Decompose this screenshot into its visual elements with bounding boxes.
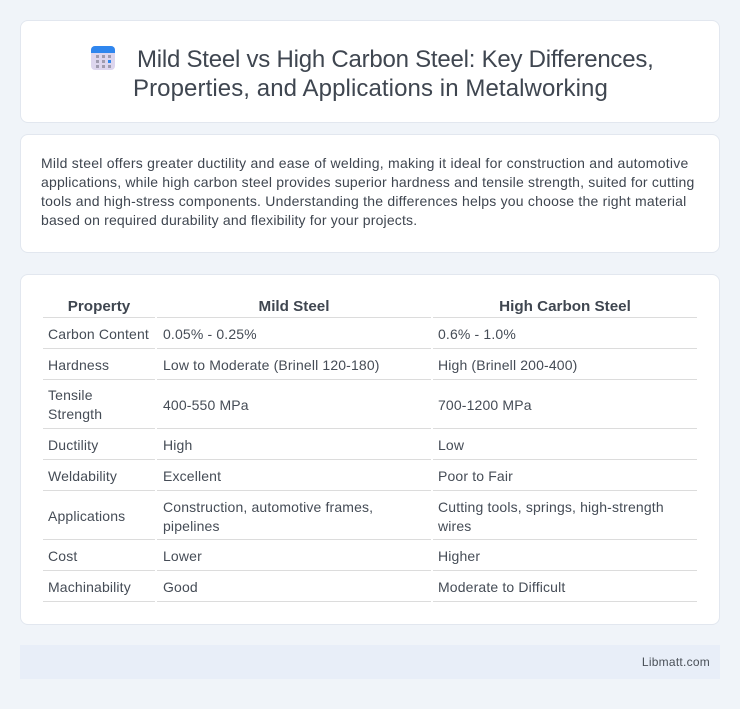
footer bar bbox=[20, 645, 720, 679]
row: hardness: Low to Moderate (Brinell 120-180) bbox=[163, 357, 380, 373]
footer bar: Libmatt.com bbox=[642, 655, 710, 669]
row: weldability: Excellent bbox=[163, 468, 221, 484]
panel: comparison table bbox=[20, 274, 720, 625]
row: tensile strength: 400-550 MPa bbox=[163, 397, 249, 413]
row: carbon content: 0.05% - 0.25% bbox=[163, 326, 257, 342]
description text: Mild steel offers greater ductility and ease of welding, making it ideal for construction and automotive bbox=[41, 155, 689, 171]
title bbox=[133, 46, 654, 102]
row: ductility: Low bbox=[438, 437, 464, 453]
row: applications: Cutting tools, springs, high-strength bbox=[438, 499, 664, 515]
description text bbox=[41, 155, 694, 228]
row: cost bbox=[48, 548, 480, 564]
panel: title card bbox=[20, 20, 720, 123]
row: hardness: High (Brinell 200-400) bbox=[438, 357, 577, 373]
row: tensile strength: 700-1200 MPa bbox=[438, 397, 532, 413]
table headers: Property bbox=[68, 298, 130, 315]
row: machinability: Machinability bbox=[48, 579, 131, 595]
row: weldability: Weldability bbox=[48, 468, 117, 484]
description text: tools and high-stress components. Understanding the differences helps you choose the right material bbox=[41, 193, 686, 209]
row: applications: pipelines bbox=[163, 518, 220, 534]
description text: applications, while high carbon steel provides superior hardness and tensile strength, suited for cutting bbox=[41, 174, 694, 190]
row: machinability: Moderate to Difficult bbox=[438, 579, 565, 595]
table headers: Mild Steel bbox=[259, 298, 329, 315]
row: applications: Applications bbox=[48, 508, 125, 524]
row: applications: Construction, automotive frames, bbox=[163, 499, 373, 515]
row: weldability: Poor to Fair bbox=[438, 468, 513, 484]
row: cost: Higher bbox=[438, 548, 480, 564]
row: tensile strength bbox=[48, 387, 532, 422]
row: hardness: Hardness bbox=[48, 357, 109, 373]
row: carbon content: 0.6% - 1.0% bbox=[438, 326, 516, 342]
text: Tensile bbox=[48, 387, 93, 403]
table headers: High Carbon Steel bbox=[499, 298, 631, 315]
description text: based on required durability and flexibility for your projects. bbox=[41, 212, 417, 228]
row: carbon content bbox=[48, 326, 516, 342]
row: weldability bbox=[48, 468, 513, 484]
row: machinability bbox=[48, 579, 566, 595]
table headers bbox=[68, 298, 631, 315]
row: cost: Lower bbox=[163, 548, 202, 564]
row: applications bbox=[48, 499, 664, 534]
title: Properties, and Applications in Metalworking bbox=[133, 75, 608, 102]
row: ductility bbox=[48, 437, 464, 453]
title: Mild Steel vs High Carbon Steel: Key Differences, bbox=[137, 46, 654, 73]
row: ductility: High bbox=[163, 437, 192, 453]
row: machinability: Good bbox=[163, 579, 198, 595]
row: ductility: Ductility bbox=[48, 437, 98, 453]
row: carbon content: Carbon Content bbox=[48, 326, 149, 342]
row: applications: wires bbox=[438, 518, 471, 534]
row: hardness bbox=[48, 357, 577, 373]
row: cost: Cost bbox=[48, 548, 77, 564]
icon: calendar bbox=[91, 46, 115, 70]
panel: description card bbox=[20, 134, 720, 253]
row: tensile strength: Strength bbox=[48, 406, 102, 422]
